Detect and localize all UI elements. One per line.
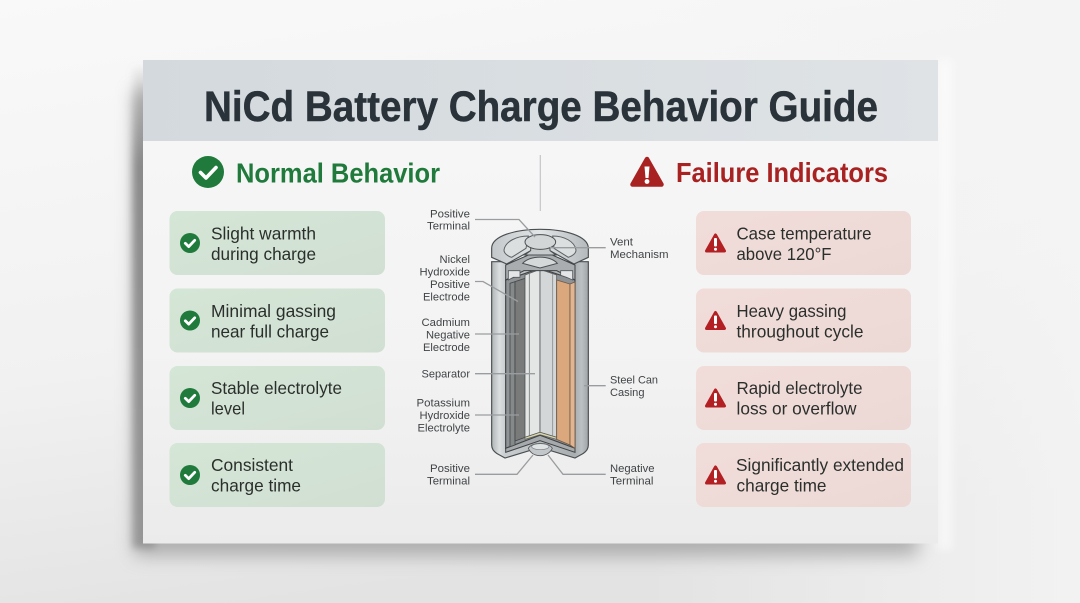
label: nickel hydroxide: Hydroxide [420, 266, 470, 278]
label: cadmium: Cadmium [422, 317, 470, 329]
orange electrode [557, 280, 570, 445]
inner section background [506, 268, 575, 448]
card: extended charge time: charge time [736, 476, 826, 496]
card: heavy gassing [696, 288, 911, 352]
right callout labels [548, 237, 668, 488]
label: cadmium: Electrode [423, 342, 470, 354]
header band [143, 60, 938, 141]
heading: failure indicators [632, 157, 888, 188]
heading text: Normal Behavior [236, 157, 440, 188]
core right [540, 269, 557, 437]
card: slight warmth [170, 211, 385, 275]
card: slight warmth: during charge [211, 244, 316, 264]
card: slight warmth: Slight warmth [211, 224, 316, 244]
card: stable electrolyte: level [211, 398, 245, 418]
can body [492, 262, 588, 458]
card: stable electrolyte [170, 366, 385, 430]
label: positive terminal bottom: Positive [430, 463, 470, 475]
label: separator [422, 368, 535, 380]
card: extended charge time: Significantly extended [736, 455, 904, 475]
yellow bottom band [525, 432, 557, 439]
label: potassium hydroxide: Hydroxide [420, 410, 470, 422]
label: nickel hydroxide: Electrode [423, 292, 470, 304]
card: minimal gassing [170, 288, 385, 352]
icon: large warning [632, 159, 662, 184]
top cap [492, 229, 588, 280]
center divider [539, 155, 541, 211]
bottom terminal [528, 443, 552, 456]
card: minimal gassing: near full charge [211, 322, 329, 342]
card: case temperature: Case temperature [736, 224, 872, 244]
title: NiCd Battery Charge Behavior Guide [204, 83, 878, 131]
label: separator: Separator [422, 368, 470, 380]
label: potassium hydroxide: Electrolyte [418, 422, 470, 434]
card: rapid electrolyte loss: loss or overflow [736, 398, 857, 418]
card: extended charge time [696, 443, 911, 507]
panel [143, 60, 938, 544]
label: steel can casing: Casing [610, 387, 644, 399]
label: potassium hydroxide [416, 398, 519, 434]
card: heavy gassing: Heavy gassing [736, 301, 846, 321]
inner seal [506, 254, 575, 280]
label: positive terminal top: Terminal [427, 221, 470, 233]
icon: large check [192, 156, 224, 188]
heading text: Failure Indicators [676, 157, 888, 188]
left callout labels [416, 208, 535, 488]
label: vent mechanism: Mechanism [610, 249, 668, 261]
card: consistent charge time [170, 443, 385, 507]
label: steel can casing [584, 374, 658, 399]
label: positive terminal top: Positive [430, 208, 470, 220]
card: rapid electrolyte loss: Rapid electrolyte [736, 378, 862, 398]
panel: failure indicator cards [696, 211, 911, 507]
card: heavy gassing: throughout cycle [736, 322, 864, 342]
label: nickel hydroxide [420, 254, 518, 304]
card: stable electrolyte: Stable electrolyte [211, 378, 342, 398]
label: vent mechanism [550, 237, 668, 261]
card: rapid electrolyte loss [696, 366, 911, 430]
label: positive terminal bottom [427, 455, 533, 488]
cap recesses [504, 236, 528, 257]
label: vent mechanism: Vent [610, 237, 633, 249]
separator layers [525, 269, 540, 437]
label: positive terminal top [427, 208, 535, 237]
label: negative terminal [548, 455, 654, 488]
label: positive terminal bottom: Terminal [427, 476, 470, 488]
panel drop shadow [133, 68, 918, 556]
label: steel can casing: Steel Can [610, 374, 658, 386]
panel: normal behavior cards [170, 211, 385, 507]
label: nickel hydroxide: Nickel [440, 254, 470, 266]
heading: normal behavior [192, 156, 440, 188]
label: nickel hydroxide: Positive [430, 279, 470, 291]
cylinder bottom inner wall [506, 435, 575, 452]
battery cutaway diagram [492, 229, 588, 458]
cadmium electrode [515, 278, 525, 441]
label: cadmium [422, 317, 519, 354]
card: minimal gassing: Minimal gassing [211, 301, 336, 321]
label: negative terminal: Terminal [610, 476, 654, 488]
card: consistent charge time: charge time [211, 476, 301, 496]
card: case temperature: above 120°F [736, 244, 832, 264]
outer dark electrode [510, 282, 515, 447]
vent button [525, 235, 556, 249]
label: potassium hydroxide: Potassium [416, 398, 470, 410]
card: consistent charge time: Consistent [211, 455, 293, 475]
label: negative terminal: Negative [610, 463, 654, 475]
card: case temperature [696, 211, 911, 275]
label: cadmium: Negative [426, 330, 470, 342]
